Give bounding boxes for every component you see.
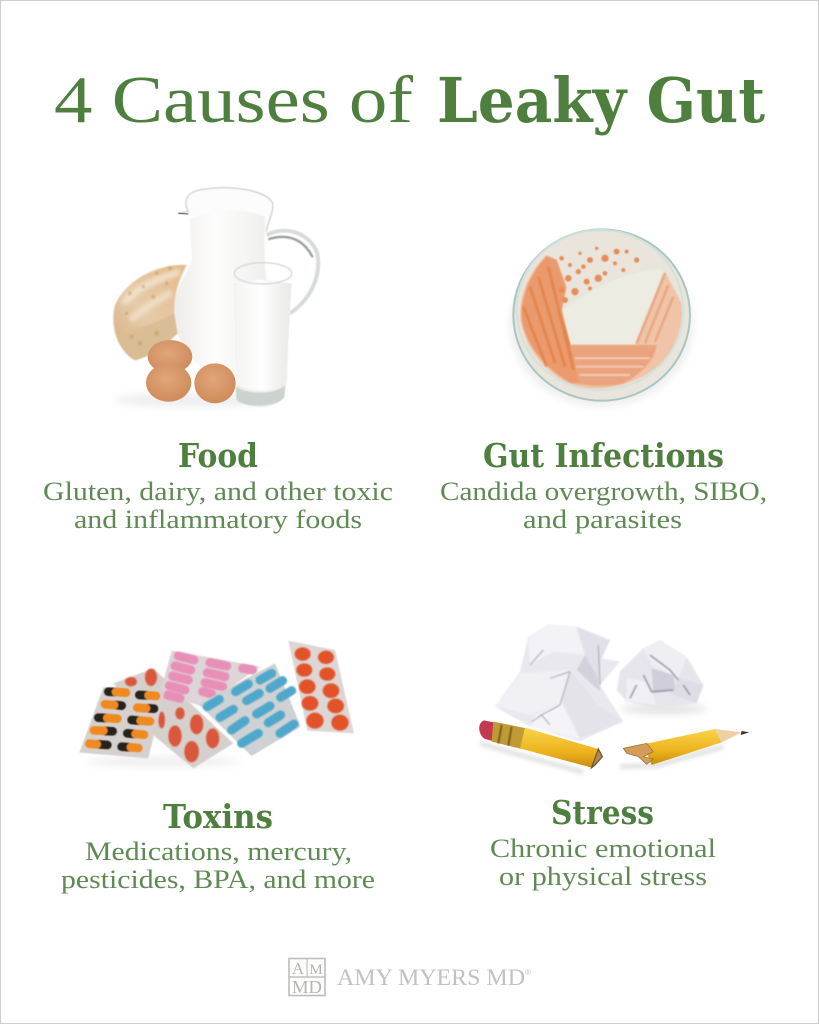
- text: toxins description: Medications, mercury,: [85, 837, 352, 866]
- ferrule: [492, 722, 527, 749]
- jug handle: [267, 231, 318, 313]
- orange black capsule pack: [79, 687, 165, 758]
- eggs: [148, 340, 192, 373]
- text: food description: Gluten, dairy, and other toxic: [43, 477, 393, 506]
- heading: stress: Stress: [551, 793, 654, 832]
- text: stress description: [490, 834, 716, 891]
- logo mark: M: [309, 962, 323, 978]
- left streak: [521, 256, 580, 383]
- jug milk: [173, 211, 267, 373]
- heading: gut infections: Gut Infections: [483, 436, 724, 475]
- text: gut infections description: Candida overgrowth, SIBO,: [440, 477, 767, 506]
- text: toxins description: [61, 837, 375, 894]
- peach base of streaks: [520, 255, 682, 389]
- panel: gut infections: [440, 229, 767, 534]
- pencil tip: [715, 729, 742, 742]
- text: toxins description: pesticides, BPA, and more: [61, 865, 375, 894]
- title: 4 Causes of: [54, 63, 414, 137]
- image: blister packs: [79, 641, 354, 768]
- image: milk, bread and eggs: [113, 188, 318, 407]
- heading: food: Food: [178, 436, 258, 475]
- title: Leaky Gut: [437, 64, 765, 137]
- text: gut infections description: [440, 477, 767, 534]
- colonies at top: [559, 247, 639, 303]
- text: food description: [43, 477, 393, 534]
- logo mark: A: [292, 959, 305, 978]
- image: petri dish: [510, 229, 693, 407]
- title: [54, 63, 765, 137]
- blue pack: [198, 663, 301, 756]
- pencil shadows: [480, 743, 583, 772]
- bread: [113, 265, 187, 360]
- heading: toxins: Toxins: [163, 797, 273, 836]
- jug rim: [178, 188, 273, 232]
- panel: stress: [479, 624, 749, 891]
- red pack behind: [113, 668, 233, 768]
- pink pack: [160, 651, 260, 707]
- text: food description: and inflammatory foods: [74, 505, 362, 534]
- bottom streak: [570, 345, 657, 386]
- panel: toxins: [61, 641, 375, 894]
- text: stress description: Chronic emotional: [490, 834, 716, 863]
- right streak: [637, 273, 673, 343]
- crumpled paper small: [617, 640, 703, 708]
- pencil left part: [520, 728, 598, 768]
- logo: Amy Myers MD: [289, 958, 531, 997]
- registered mark: ®: [525, 968, 531, 977]
- panel: food: [43, 188, 393, 534]
- crumpled paper large: [495, 624, 623, 741]
- logo mark: [289, 958, 325, 997]
- logo mark: MD: [292, 977, 322, 997]
- eraser: [479, 720, 498, 742]
- pencil right part: [643, 729, 722, 765]
- image: crumpled paper and broken pencil: [479, 624, 749, 772]
- glass: [234, 283, 292, 407]
- text: gut infections description: and parasites: [523, 505, 682, 534]
- red narrow pack: [288, 641, 354, 733]
- text: stress description: or physical stress: [499, 862, 707, 891]
- wordmark: AMY MYERS MD: [337, 965, 525, 990]
- agar clear centre: [562, 270, 663, 345]
- inner rim: [517, 230, 683, 390]
